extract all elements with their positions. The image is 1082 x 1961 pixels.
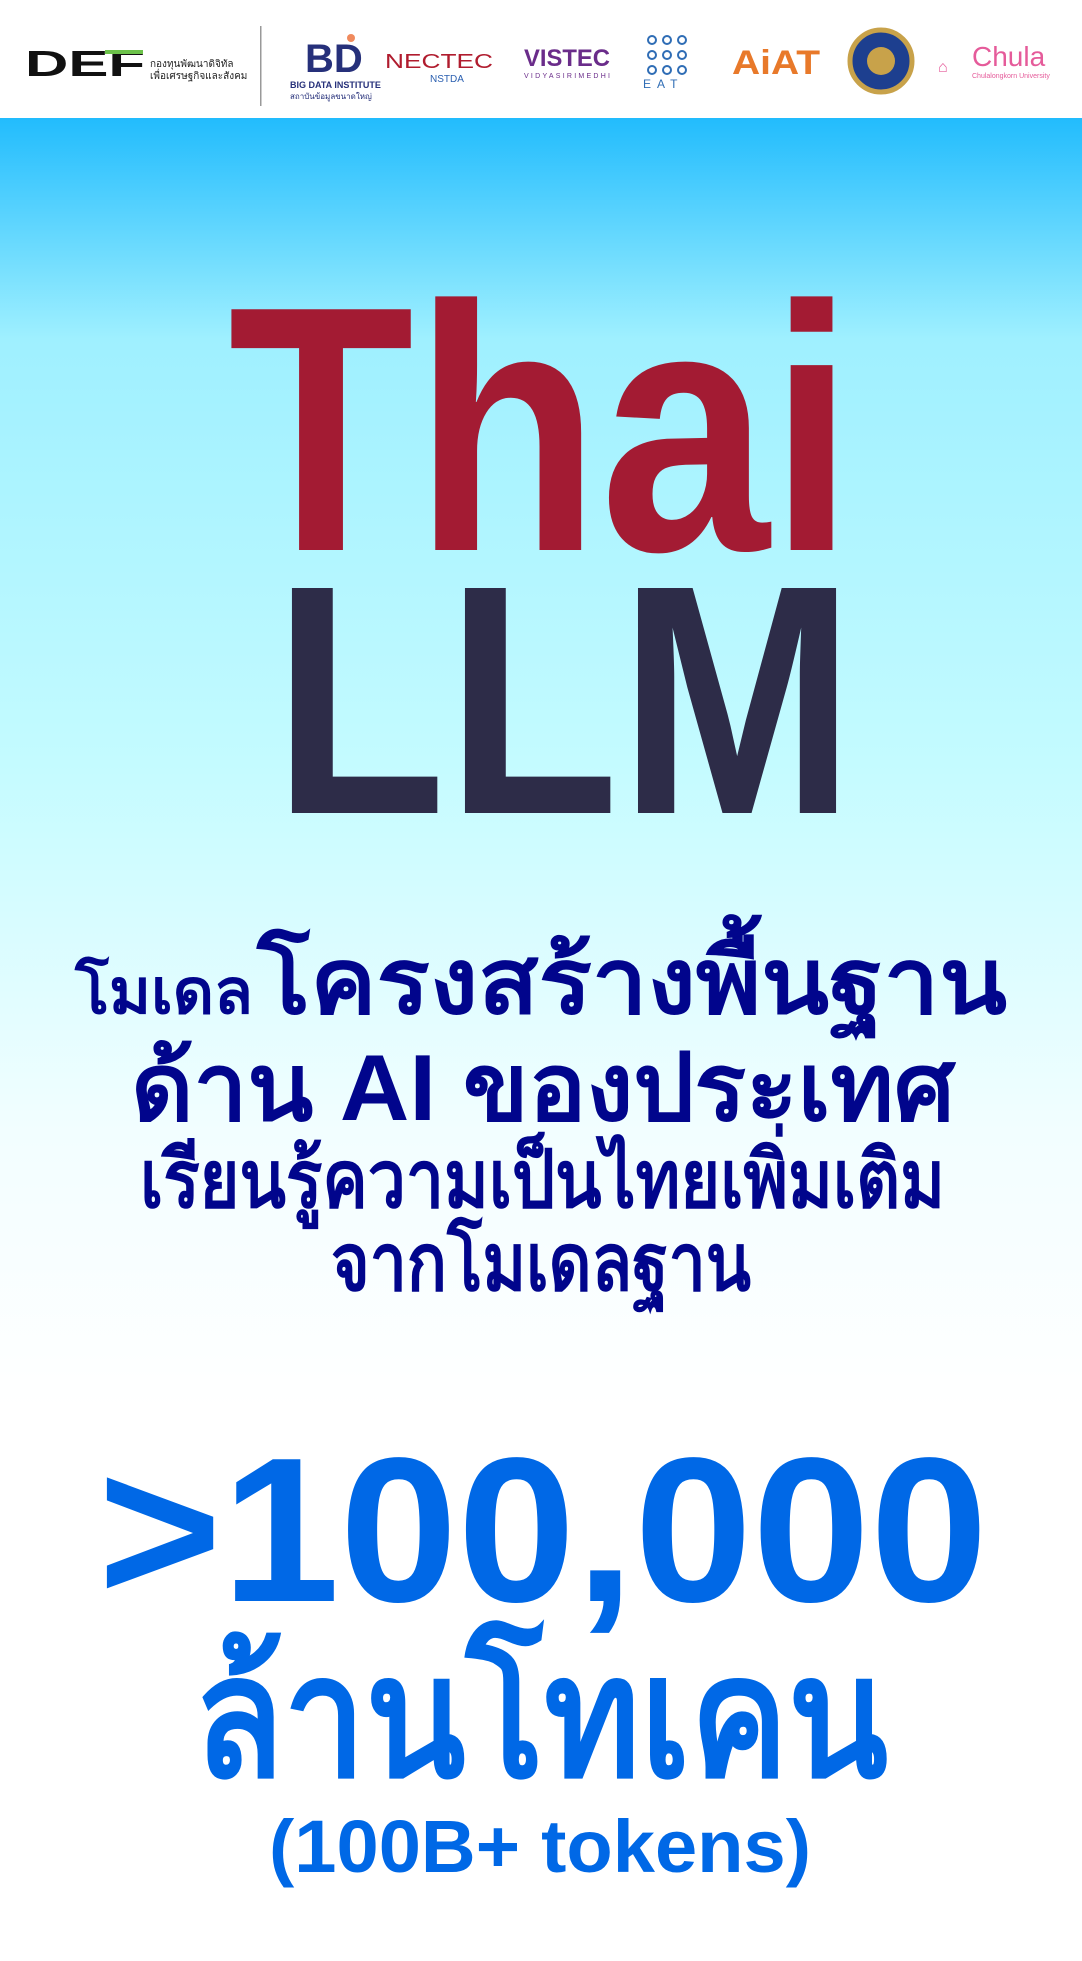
logo: DEF: เพื่อเศรษฐกิจและสังคม [150,68,247,82]
logo: DEF [25,43,247,84]
unit: million tokens: ล้านโทเคน [194,1619,888,1813]
logo: EAT [643,36,686,91]
logo: Chula [938,41,1050,80]
subtitle text block: โมเดล [74,955,253,1027]
subtitle text block: เรียนรู้ความเป็นไทยเพิ่มเติม [140,1123,945,1230]
header bar with logos [0,0,1082,118]
logo: Chula: Chula [972,41,1046,72]
logo: DEF: กองทุนพัฒนาดิจิทัล [150,59,234,70]
logo: Big Data Institute: สถาบันข้อมูลขนาดใหญ่ [290,92,372,102]
logo: NECTEC: NECTEC [385,51,493,73]
logo: EAT: EAT [643,77,683,91]
title: LLM: LLM [273,518,855,883]
logo: Chula: Chulalongkorn University [972,73,1050,80]
title: Thai: Thai [228,234,854,625]
logo: Big Data Institute: BIG DATA INSTITUTE [290,80,381,90]
logo: Big Data Institute: BD [305,37,363,81]
logo: VISTEC: VISTEC [524,45,610,72]
logo: NECTEC [385,51,493,85]
logo: VISTEC: VIDYASIRIMEDHI [524,73,610,80]
subtitle text block: โครงสร้างพื้นฐาน [256,914,1007,1042]
big number: >100,000 [98,1415,988,1645]
subtitle text block: จากโมเดลฐาน [331,1215,751,1315]
english note: (100B+ tokens) [269,1805,811,1888]
logo: university seal [850,30,912,92]
logo: NECTEC: NSTDA [430,74,464,85]
subtitle text block: ด้าน AI ของประเทศ [131,1035,956,1140]
logo: Big Data Institute [290,34,381,102]
logo: Chula: ⌂ [938,59,948,76]
subtitle text block [74,914,1007,1315]
logo: AiAT: AiAT [732,44,820,82]
logo: DEF: DEF [25,43,145,84]
